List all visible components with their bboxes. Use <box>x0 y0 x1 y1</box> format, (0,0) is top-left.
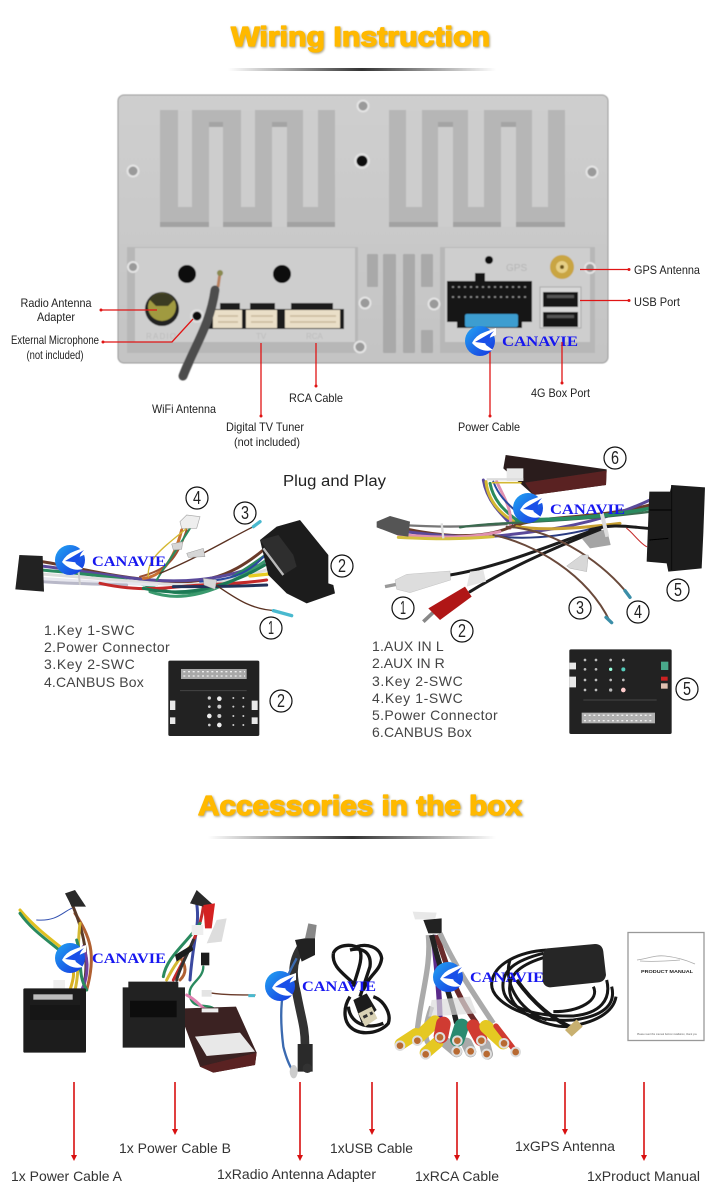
center mounting hole <box>354 153 370 169</box>
power connector socket <box>447 273 532 328</box>
CANBUS box <box>487 455 607 495</box>
red callout lines: head unit <box>100 268 630 418</box>
white connector sockets <box>207 303 344 329</box>
ISO plug <box>15 555 44 592</box>
plug <box>23 988 86 1053</box>
logo: CANAVIE on head unit: CANAVIE <box>502 334 578 350</box>
list: left harness parts: 1.Key 1-SWC <box>44 622 135 638</box>
small grey plug <box>377 516 410 537</box>
label: 1xUSB Cable: 1xUSB Cable <box>330 1140 413 1156</box>
left port bay: RADIO <box>146 332 176 341</box>
CANBUS plug 4 <box>180 515 200 528</box>
screws <box>128 100 598 352</box>
heading: Plug and Play: Plug and Play <box>283 473 386 490</box>
RCA plug white <box>385 571 451 593</box>
product manual booklet: PRODUCT MANUAL <box>641 969 693 975</box>
list: left harness parts: 4.CANBUS Box <box>44 674 144 690</box>
marker digits: left harness: 2 <box>338 556 346 576</box>
logo: CANAVIE adapter: CANAVIE <box>302 979 376 995</box>
label: External Microphone: (not included) <box>26 348 84 362</box>
list: right harness parts: 6.CANBUS Box <box>372 724 472 740</box>
label: GPS Antenna: GPS Antenna <box>634 263 700 277</box>
title underline <box>208 836 496 839</box>
photo: connector face 5 <box>569 649 672 734</box>
list: left harness parts: 2.Power Connector <box>44 639 170 655</box>
cable clips <box>172 542 217 589</box>
label: 1xProduct Manual: 1xProduct Manual <box>587 1168 700 1184</box>
label: External Microphone <box>11 333 99 362</box>
title: Wiring Instruction: Wiring Instruction <box>231 21 490 52</box>
marker digits: right harness: 3 <box>576 598 584 618</box>
vent slots <box>367 254 433 353</box>
panel: head unit rear photo <box>118 95 608 376</box>
right port bay: GPS <box>506 263 527 274</box>
photo: Radio Antenna Adapter <box>281 923 317 1078</box>
title underline <box>228 68 496 71</box>
number markers: right harness <box>392 447 698 700</box>
number markers: left harness <box>186 487 353 712</box>
left port bay <box>127 247 358 353</box>
logo: CANAVIE RCA <box>433 962 544 992</box>
RCA plugs <box>401 1022 515 1054</box>
marker digits: right harness: 5 <box>674 580 682 600</box>
power connector plug <box>647 485 705 572</box>
logo: CANAVIE on head unit <box>465 326 578 356</box>
label: 1xGPS Antenna: 1xGPS Antenna <box>515 1138 615 1154</box>
list: right harness parts: 4.Key 1-SWC <box>372 690 463 706</box>
cyan tips <box>253 522 292 616</box>
label: 1xRCA Cable: 1xRCA Cable <box>415 1168 499 1184</box>
marker digits: left harness: 4 <box>193 488 201 508</box>
logo: CANAVIE left harness <box>55 545 166 575</box>
left heat-sink fins <box>160 110 335 227</box>
plug <box>123 982 185 1048</box>
list: right harness parts <box>372 638 498 740</box>
marker digits: right harness <box>400 448 691 699</box>
logo: CANAVIE RCA: CANAVIE <box>470 970 544 986</box>
label: Digital TV Tuner: (not included) <box>234 435 300 449</box>
label: Radio Antenna Adapter: Radio Antenna <box>20 296 92 310</box>
label: 4G Box Port: 4G Box Port <box>531 386 591 400</box>
logo: CANAVIE Power Cable A <box>55 943 166 973</box>
logo: CANAVIE left harness: CANAVIE <box>92 554 166 570</box>
marker digits: right harness: 4 <box>634 602 642 622</box>
label: Radio Antenna Adapter: Adapter <box>37 310 75 324</box>
blue fuse <box>465 314 518 327</box>
label: RCA Cable: RCA Cable <box>289 391 343 405</box>
marker digits: right harness: 2 <box>458 621 466 641</box>
product manual booklet: Please read this manual before installation, thank you <box>637 1032 698 1036</box>
product manual booklet <box>628 932 704 1040</box>
USB ports <box>540 287 581 328</box>
logo: CANAVIE right harness: CANAVIE <box>550 502 625 518</box>
left port bay: TV <box>256 332 267 341</box>
list: right harness parts: 3.Key 2-SWC <box>372 673 463 689</box>
marker digits: left harness <box>193 488 346 711</box>
red arrows: accessories <box>71 1082 647 1161</box>
cable labels <box>582 528 611 548</box>
label: WiFi Antenna: WiFi Antenna <box>152 402 216 416</box>
RCA plug red <box>423 587 472 622</box>
label: Digital TV Tuner <box>226 420 304 449</box>
label: USB Port: USB Port <box>634 295 681 309</box>
list: left harness parts <box>44 622 170 690</box>
logo: CANAVIE right harness <box>513 493 625 523</box>
label: 1x Power Cable B: 1x Power Cable B <box>119 1140 231 1156</box>
microphone jack <box>190 309 204 323</box>
label: Radio Antenna Adapter <box>20 296 92 324</box>
list: left harness parts: 3.Key 2-SWC <box>44 656 135 672</box>
label: 1x Power Cable A: 1x Power Cable A <box>11 1168 123 1184</box>
power connector plug <box>260 520 335 603</box>
label: Digital TV Tuner: Digital TV Tuner <box>226 420 304 434</box>
label: Power Cable: Power Cable <box>458 420 520 434</box>
photo: GPS Antenna <box>492 944 616 1037</box>
photo: connector face 2 <box>168 661 259 736</box>
photo: USB Cable <box>333 945 389 1033</box>
cyan tips <box>606 591 630 623</box>
photo: RCA Cable <box>396 912 520 1059</box>
title: Accessories in the box: Accessories in the box <box>198 790 522 821</box>
marker digits: left harness: 1 <box>268 618 274 638</box>
marker digits: right harness: 1 <box>400 598 406 618</box>
marker digits: right harness: 6 <box>611 448 619 468</box>
GPS connector <box>550 255 574 279</box>
list: right harness parts: 1.AUX IN L <box>372 638 444 654</box>
left port bay: RCA <box>306 332 324 341</box>
logo: CANAVIE adapter <box>265 971 376 1001</box>
photo: right harness with CANBUS box <box>377 455 705 623</box>
photo: left power harness <box>15 515 335 616</box>
logo: CANAVIE Power Cable A: CANAVIE <box>92 951 166 967</box>
photo: Power Cable B <box>123 890 257 1073</box>
CANBUS box <box>185 1007 257 1073</box>
photo: Power Cable A <box>20 890 91 1053</box>
list: right harness parts: 5.Power Connector <box>372 707 498 723</box>
marker digits: right harness: 5 <box>683 679 691 699</box>
list: right harness parts: 2.AUX IN R <box>372 655 445 671</box>
radio socket <box>145 292 179 326</box>
label: External Microphone: External Microphone <box>11 333 99 347</box>
right heat-sink fins <box>389 110 565 227</box>
label: 1xRadio Antenna Adapter: 1xRadio Antenna Adapter <box>217 1166 376 1182</box>
marker digits: left harness: 2 <box>277 691 285 711</box>
right port bay <box>440 247 595 353</box>
WiFi antenna cable <box>183 270 223 376</box>
marker digits: left harness: 3 <box>241 503 249 523</box>
